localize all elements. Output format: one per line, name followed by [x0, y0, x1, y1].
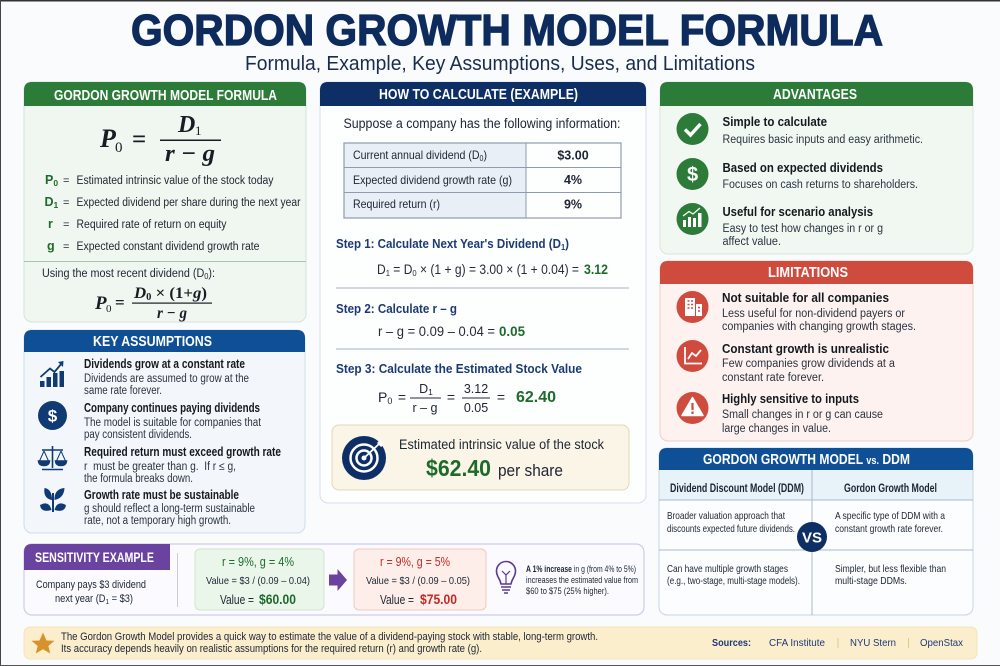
step 1: 3.12 — [584, 261, 608, 277]
step 3: P — [378, 389, 387, 405]
step 2: Step 2: Calculate r – g — [336, 301, 457, 316]
summary text: The Gordon Growth Model provides a quick way to estimate the value of a dividend-paying stock with stable, long-term growth. — [61, 631, 598, 643]
icon: dollar — [676, 158, 708, 190]
limitation: not suitable: companies with changing growth stages. — [722, 321, 916, 333]
icon: chart — [676, 203, 708, 235]
panel: how to calculate — [320, 82, 646, 503]
advantage: simple — [722, 115, 923, 146]
limitation: unrealistic: Few companies grow dividends at a — [722, 358, 896, 370]
sources: CFA Institute — [769, 637, 825, 649]
alternate formula: 0 — [146, 292, 151, 303]
main formula: P — [99, 124, 117, 153]
insight text: $60 to $75 (25% higher). — [526, 586, 609, 596]
alternate formula: 0 — [204, 272, 209, 281]
advantage: simple: Requires basic inputs and easy arithmetic. — [722, 134, 923, 146]
icon: line chart — [676, 340, 708, 372]
step 3: 3.12 — [464, 382, 488, 396]
limitation: unrealistic — [722, 342, 896, 384]
icon: plant — [40, 488, 66, 512]
assumption: required return: Required return must exceed growth rate — [84, 445, 281, 459]
main formula: 0 — [115, 140, 122, 156]
step 1: 0 — [412, 268, 417, 278]
step 3: D — [419, 382, 428, 396]
limitations header — [660, 261, 973, 284]
assumption: required return: r must be greater than g. If r ≤ g, — [84, 461, 236, 473]
main formula — [99, 112, 221, 167]
sources — [712, 637, 964, 649]
gordon column — [835, 483, 946, 587]
step 3: Step 3: Calculate the Estimated Stock Value — [336, 361, 582, 376]
limitation: sensitive: Highly sensitive to inputs — [722, 392, 859, 406]
result callout: $62.40 — [426, 455, 491, 481]
limitation: not suitable: Not suitable for all companies — [722, 291, 889, 305]
sources: Sources: — [712, 637, 751, 649]
assumption: sustainable: rate, not a temporary high growth. — [84, 515, 231, 527]
assumption: sustainable — [84, 488, 255, 527]
panel: key assumptions — [24, 330, 305, 533]
assumption: constant rate: Dividends are assumed to grow at the — [84, 373, 249, 385]
step 1: = D — [390, 262, 413, 277]
icon: dollar: $ — [687, 164, 698, 186]
advantage: simple: Simple to calculate — [722, 115, 827, 129]
step 1: × (1 + g) = 3.00 × (1 + 0.04) = — [417, 262, 579, 277]
limitation: not suitable — [722, 291, 916, 333]
subtitle: Formula, Example, Key Assumptions, Uses, and Limitations — [245, 53, 755, 75]
scenario premise: 1 — [106, 597, 109, 606]
assumption: required return — [84, 445, 281, 485]
panel: advantages — [660, 82, 973, 254]
step 2: r – g = 0.09 – 0.04 = — [378, 324, 495, 339]
intro text: Suppose a company has the following information: — [344, 116, 620, 131]
icon: buildings — [676, 291, 708, 323]
icon: warning — [676, 392, 708, 424]
how to calculate header — [320, 82, 646, 106]
variable definitions: = — [63, 197, 69, 209]
sensitivity header — [24, 544, 170, 570]
sources: NYU Stern — [850, 637, 896, 649]
input table — [344, 143, 621, 218]
advantages header — [660, 82, 973, 106]
step 3: 62.40 — [516, 389, 556, 406]
scenario premise: Company pays $3 dividend — [36, 579, 146, 591]
result callout: per share — [498, 462, 563, 480]
gordon column: Simpler, but less flexible than — [835, 563, 946, 575]
comparison header — [659, 448, 973, 470]
vs badge — [797, 522, 827, 552]
advantage: scenario — [722, 205, 883, 248]
icon: target — [342, 436, 386, 480]
insight text: A 1% increase in g (from 4% to 5%) — [526, 564, 636, 574]
alternate formula: D — [134, 285, 146, 302]
main formula: = — [132, 126, 146, 153]
assumption: continues paying: The model is suitable for companies that — [84, 417, 262, 429]
variable definitions: P — [45, 173, 53, 187]
step 1 — [336, 236, 608, 278]
limitation: sensitive: large changes in value. — [722, 423, 831, 435]
panel: limitations — [660, 261, 973, 441]
summary text — [61, 631, 598, 655]
advantage: dividends — [722, 161, 918, 191]
arrow — [329, 569, 347, 591]
assumption: constant rate: Dividends grow at a constant rate — [84, 357, 245, 371]
scenario: g 4%: Value = — [220, 593, 254, 607]
insight text: increases the estimated value from — [526, 575, 638, 585]
scenario: g 4%: r = 9%, g = 4% — [222, 554, 294, 569]
assumption: constant rate: same rate forever. — [84, 385, 162, 397]
variable definitions: Expected constant dividend growth rate — [76, 241, 260, 253]
input table: $3.00 — [557, 148, 589, 162]
icon: check — [676, 113, 708, 145]
scenario: g 5%: r = 9%, g = 5% — [380, 554, 450, 569]
key assumptions header: KEY ASSUMPTIONS — [93, 334, 212, 350]
step 1: 1 — [561, 242, 565, 252]
variable definitions: = — [63, 219, 69, 231]
ddm column: Dividend Discount Model (DDM) — [670, 483, 804, 495]
advantages header: ADVANTAGES — [773, 87, 857, 103]
main formula: r − g — [165, 141, 215, 167]
alternate formula: 0 — [106, 303, 112, 315]
step 3: = — [398, 389, 406, 405]
icon: dollar — [38, 401, 67, 430]
formula panel header: GORDON GROWTH MODEL FORMULA — [54, 88, 277, 104]
limitation: sensitive: Small changes in r or g can cause — [722, 409, 883, 421]
variable definitions: Estimated intrinsic value of the stock today — [76, 175, 274, 187]
scenario: g 4%: Value = $3 / (0.09 – 0.04) — [206, 575, 310, 587]
variable definitions: Expected dividend per share during the next year — [76, 197, 301, 209]
assumption: constant rate — [84, 357, 249, 397]
step 1: ) — [565, 236, 569, 251]
icon: dollar: $ — [48, 406, 58, 426]
advantage: dividends: Focuses on cash returns to shareholders. — [722, 179, 918, 191]
step 2 — [336, 301, 525, 339]
panel: gordon vs ddm — [659, 448, 973, 615]
input table: Expected dividend growth rate (g) — [353, 173, 512, 187]
variable definitions — [44, 173, 301, 253]
scenario: g 4%: $60.00 — [259, 592, 296, 607]
alternate formula: ): — [208, 268, 215, 280]
variable definitions: 0 — [53, 178, 58, 188]
alternate formula: × (1+ — [151, 285, 193, 302]
alternate formula: g) — [193, 285, 207, 302]
assumption: continues paying: Company continues paying dividends — [84, 401, 260, 415]
variable definitions: 1 — [54, 200, 59, 210]
variable definitions: Required rate of return on equity — [76, 219, 227, 231]
step 1: D — [377, 262, 387, 277]
ddm column: Broader valuation approach that — [667, 510, 785, 522]
gordon column: constant growth rate forever. — [835, 523, 943, 535]
result callout — [332, 425, 629, 490]
alternate formula: r − g — [157, 305, 187, 322]
input table: 0 — [480, 154, 484, 163]
alternate formula — [42, 268, 215, 322]
ddm column: (e.g., two-stage, multi-stage models). — [667, 575, 800, 587]
icon: light bulb — [496, 562, 516, 593]
advantage: scenario: Easy to test how changes in r or g — [722, 223, 883, 235]
how to calculate header: HOW TO CALCULATE (EXAMPLE) — [379, 87, 578, 103]
icon: scales — [38, 446, 66, 470]
step 1: Step 1: Calculate Next Year's Dividend (D — [336, 236, 590, 251]
footer banner — [24, 627, 977, 659]
step 3: 0.05 — [464, 401, 488, 415]
limitation: sensitive — [722, 392, 883, 435]
assumption: required return: the formula breaks down. — [84, 473, 193, 485]
sources: OpenStax — [920, 637, 964, 649]
alternate formula: P — [94, 293, 107, 314]
title: GORDON GROWTH MODEL FORMULA — [131, 6, 883, 55]
scenario premise — [36, 579, 146, 606]
input table: Required return (r) — [353, 197, 440, 211]
scenario: g 5% — [354, 549, 486, 610]
icon: star — [32, 632, 54, 654]
panel: sensitivity example — [24, 544, 644, 615]
ddm column — [667, 483, 804, 587]
step 3: r – g — [412, 401, 438, 415]
main formula: 1 — [195, 123, 202, 138]
step 3 — [336, 361, 582, 415]
result callout: Estimated intrinsic value of the stock — [399, 437, 604, 452]
insight text — [526, 564, 638, 596]
formula panel header — [24, 82, 306, 106]
alternate formula: = — [115, 293, 125, 312]
ddm column: discounts expected future dividends. — [667, 523, 795, 535]
comparison header: GORDON GROWTH MODEL vs. DDM — [703, 452, 910, 468]
input table: 9% — [564, 198, 582, 212]
limitations header: LIMITATIONS — [768, 265, 848, 281]
sensitivity header: SENSITIVITY EXAMPLE — [35, 550, 154, 565]
variable definitions: = — [63, 175, 69, 187]
scenario: g 5%: Value = $3 / (0.09 – 0.05) — [366, 575, 470, 587]
variable definitions: r — [48, 217, 53, 231]
variable definitions: D — [44, 195, 54, 209]
advantage: scenario: Useful for scenario analysis — [722, 205, 873, 219]
scenario premise: = $3) — [109, 593, 133, 605]
limitation: unrealistic: constant rate forever. — [722, 372, 824, 384]
panel: formula — [24, 82, 306, 322]
limitation: unrealistic: Constant growth is unrealistic — [722, 342, 889, 356]
scenario: g 5%: Value = — [380, 593, 414, 607]
advantage: dividends: Based on expected dividends — [722, 161, 883, 175]
scenario: g 5%: $75.00 — [420, 592, 457, 607]
vs badge: VS — [802, 530, 822, 546]
summary text: Its accuracy depends heavily on realistic assumptions for the required return (r) and growth rate (g). — [61, 643, 482, 655]
input table: ) — [483, 148, 487, 162]
scenario: g 4% — [195, 549, 324, 610]
step 2: 0.05 — [499, 323, 525, 339]
gordon column: multi-stage DDMs. — [835, 575, 907, 587]
step 1: 1 — [386, 268, 390, 278]
gordon column: Gordon Growth Model — [844, 483, 937, 495]
step 3: 0 — [387, 396, 392, 406]
input table: Current annual dividend (D — [353, 148, 496, 162]
alternate formula: Using the most recent dividend (D — [42, 268, 215, 280]
assumption: continues paying — [84, 401, 262, 441]
main formula: D — [177, 112, 195, 138]
assumption: continues paying: pay consistent dividends. — [84, 429, 192, 441]
step 3: 1 — [428, 387, 433, 397]
advantage: scenario: affect value. — [722, 236, 781, 248]
assumption: sustainable: g should reflect a long-term sustainable — [84, 503, 255, 515]
ddm column: Can have multiple growth stages — [667, 563, 788, 575]
step 3: = — [497, 389, 505, 405]
assumption: sustainable: Growth rate must be sustainable — [84, 488, 239, 502]
gordon column: A specific type of DDM with a — [835, 510, 945, 522]
input table: 4% — [564, 173, 582, 187]
variable definitions: g — [47, 239, 55, 253]
limitation: not suitable: Less useful for non-dividend payers or — [722, 308, 905, 320]
icon: growth chart — [40, 361, 64, 387]
scenario premise: next year (D — [55, 593, 115, 605]
variable definitions: = — [63, 241, 69, 253]
step 3: = — [447, 389, 455, 405]
key assumptions header — [24, 330, 305, 352]
